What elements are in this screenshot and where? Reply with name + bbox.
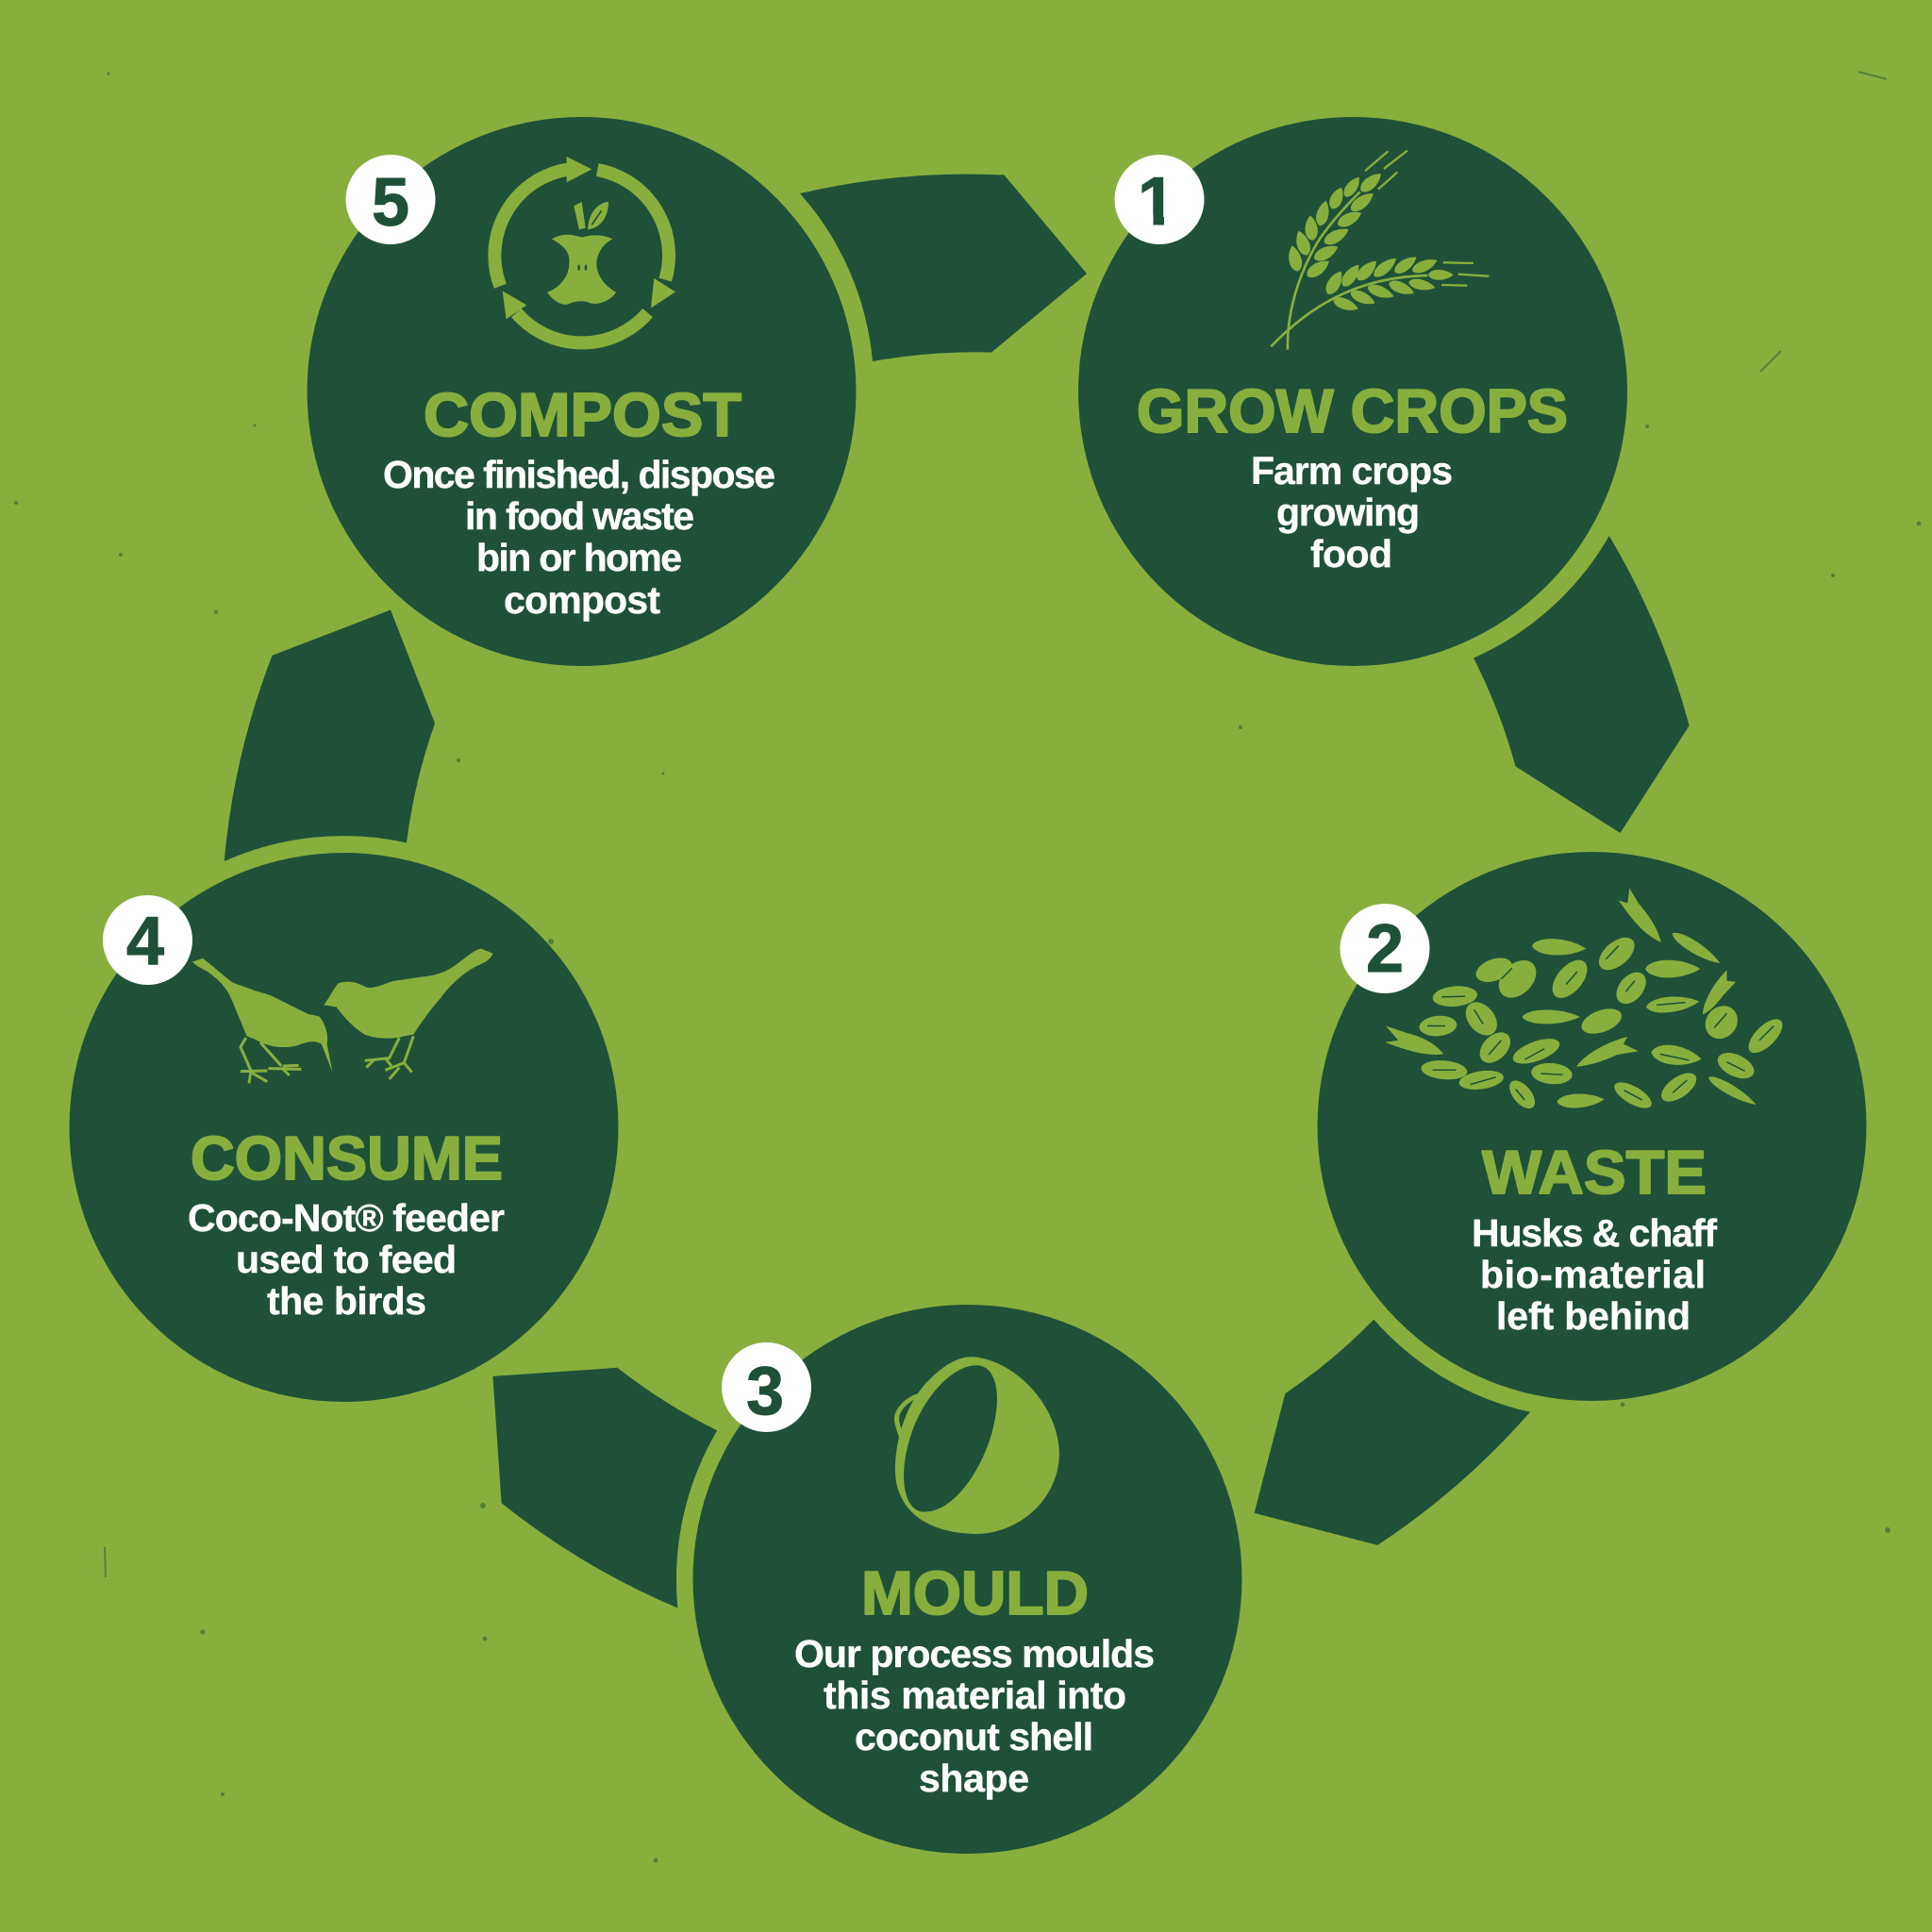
- text block: used to feed: [236, 1238, 457, 1281]
- badge: number 1: [1115, 155, 1204, 244]
- arrow: mould to consume: [492, 1368, 717, 1607]
- badge: number 2: [1340, 904, 1430, 993]
- badge: number 3: 3: [746, 1354, 784, 1429]
- panel: step 1 grow crops: [1078, 117, 1627, 666]
- badge: number 3: [722, 1342, 811, 1432]
- heading: COMPOST: [424, 380, 741, 449]
- arrow: grow crops to waste: [1474, 536, 1690, 833]
- text block: [383, 453, 775, 622]
- text block: Coco-Not® feeder: [188, 1196, 505, 1240]
- text block: bin or home: [476, 536, 682, 579]
- heading: GROW CROPS: [1137, 376, 1568, 445]
- panel: step 2 waste: [1317, 852, 1866, 1401]
- text block: [794, 1632, 1155, 1800]
- text block: left behind: [1496, 1294, 1690, 1338]
- text block: the birds: [267, 1279, 426, 1323]
- text block: [1472, 1211, 1717, 1338]
- arrow: compost to grow crops: [800, 175, 1087, 361]
- heading: CONSUME: [191, 1124, 503, 1192]
- heading: MOULD: [861, 1558, 1089, 1627]
- icon: coconut shell: [895, 1357, 1059, 1534]
- panel: step 4 consume: [70, 853, 619, 1402]
- text block: bio-material: [1480, 1253, 1706, 1296]
- badge: number 1: 1: [1138, 164, 1175, 240]
- text block: in food waste: [465, 494, 694, 538]
- text block: growing: [1276, 491, 1420, 534]
- panel: step 5 compost: [308, 117, 857, 666]
- text block: coconut shell: [855, 1715, 1093, 1758]
- text block: Our process moulds: [794, 1632, 1155, 1675]
- text block: Farm crops: [1251, 449, 1453, 492]
- text block: [188, 1196, 505, 1323]
- badge: number 2: 2: [1366, 911, 1404, 987]
- text block: food: [1310, 532, 1392, 575]
- badge: number 5: [345, 155, 436, 244]
- badge: number 4: 4: [126, 904, 164, 979]
- panel: step 3 mould: [692, 1305, 1241, 1854]
- heading: WASTE: [1482, 1138, 1707, 1207]
- arrow: consume to compost: [225, 609, 435, 861]
- text block: Once finished, dispose: [383, 453, 775, 496]
- text block: [1251, 449, 1453, 575]
- text block: compost: [504, 578, 660, 622]
- text block: shape: [919, 1757, 1029, 1800]
- icon: two birds: [192, 949, 493, 1083]
- text block: this material into: [824, 1674, 1126, 1717]
- badge: number 4: [103, 895, 192, 985]
- text block: Husks & chaff: [1472, 1211, 1717, 1255]
- arrow: waste to mould: [1255, 1320, 1530, 1545]
- icon: recycling arrows and apple core: [494, 157, 675, 342]
- icon: wheat: [1271, 151, 1488, 350]
- badge: number 5: 5: [372, 165, 409, 241]
- icon: husks and seeds: [1385, 888, 1788, 1113]
